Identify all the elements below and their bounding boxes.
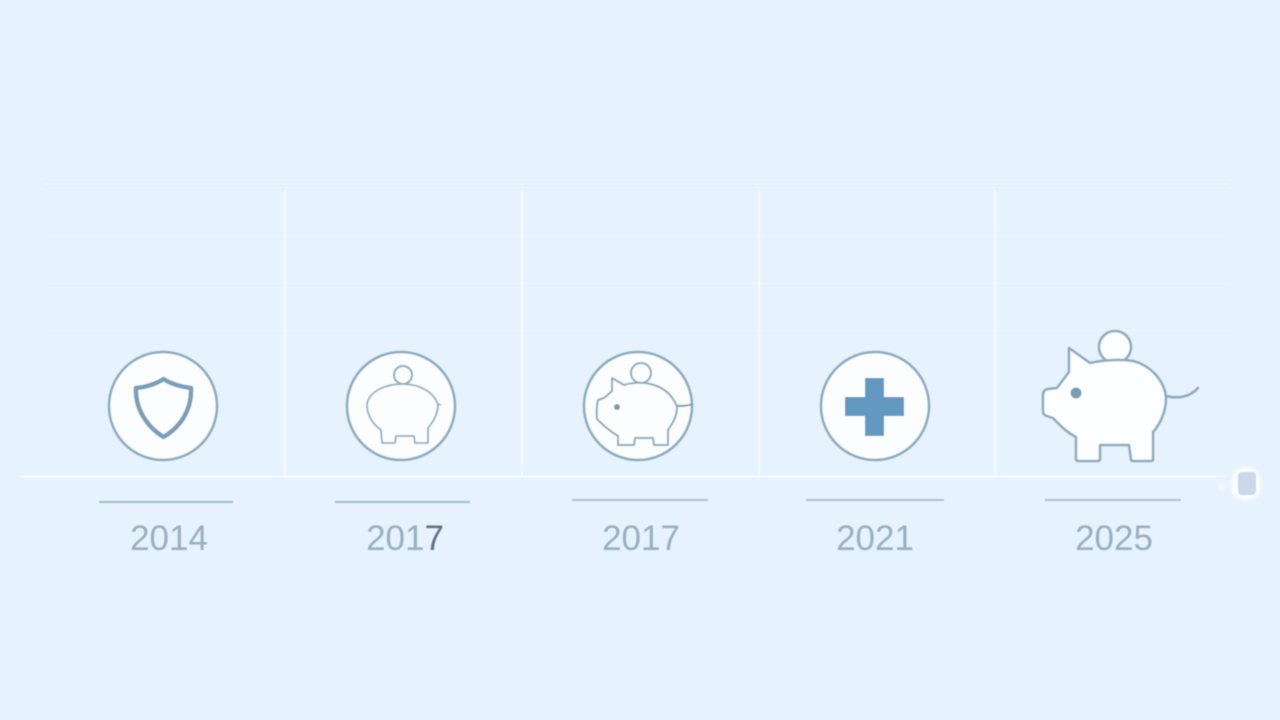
year rule xyxy=(806,499,944,501)
milestone 2021 xyxy=(806,352,944,558)
year rule xyxy=(99,501,233,503)
year label: 2014 xyxy=(130,519,208,558)
milestone 2014 xyxy=(99,352,233,558)
year rule xyxy=(572,499,708,501)
timeline end handle xyxy=(1218,468,1260,500)
milestone 2017 second xyxy=(572,352,708,558)
year label: 2021 xyxy=(836,519,914,558)
year rule xyxy=(335,501,470,503)
icon: piggy bank outline in circle xyxy=(347,352,455,460)
milestone 2017 first xyxy=(335,352,470,558)
icon: shield in circle xyxy=(109,352,217,460)
icon: plus in circle xyxy=(821,352,929,460)
icon: piggy bank with face in circle xyxy=(584,352,693,460)
year label: 2017 xyxy=(602,519,680,558)
year rule xyxy=(1045,499,1181,501)
icon: large piggy bank xyxy=(1043,331,1198,461)
year label: 2017 xyxy=(366,519,444,558)
year label: 2025 xyxy=(1075,519,1153,558)
milestone 2025 xyxy=(1043,331,1198,558)
